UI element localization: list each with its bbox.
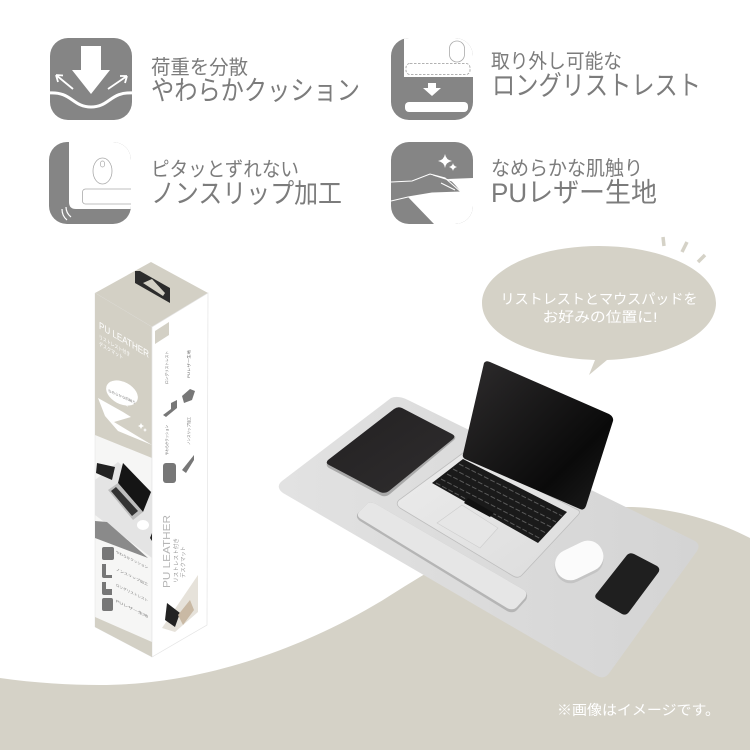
front icon 4 bbox=[102, 598, 113, 611]
side icon 3 bbox=[163, 463, 176, 483]
laptop keyboard bbox=[432, 459, 567, 543]
laptop base bbox=[397, 453, 580, 577]
box front face bbox=[95, 293, 152, 657]
heading: no slipping: ピタッとずれない bbox=[151, 158, 299, 181]
box side photo bbox=[162, 575, 198, 632]
background wave bbox=[0, 507, 750, 750]
icon: box handle bbox=[135, 271, 170, 303]
subheading: long wrist rest: ロングリストレスト bbox=[492, 71, 701, 101]
desk mat bbox=[279, 397, 699, 677]
mouse bbox=[550, 536, 608, 588]
heading: smooth touch: なめらかな肌触り bbox=[491, 157, 643, 180]
side icon 4 bbox=[182, 455, 194, 473]
box front feature icons bbox=[102, 547, 148, 619]
side text 2: PUレザー生地 bbox=[186, 349, 191, 378]
side icon 2 bbox=[182, 389, 195, 403]
laptop touchpad bbox=[437, 505, 498, 548]
heading: removable: 取り外し可能な bbox=[491, 50, 622, 73]
front icon 1 bbox=[102, 547, 114, 560]
feature: long wrist rest bbox=[391, 38, 701, 120]
box front title: PU LEATHER bbox=[99, 320, 149, 361]
icon: hand on leather bbox=[391, 142, 473, 224]
subheading: PU leather: PUレザー生地 bbox=[491, 178, 657, 208]
smartphone bbox=[595, 553, 659, 615]
box front laptop photo bbox=[95, 462, 152, 558]
laptop bbox=[397, 361, 613, 577]
side text 3: やわらかクッション bbox=[164, 425, 169, 455]
laptop screen bbox=[463, 361, 613, 510]
front feature text 3: ロングリストレスト bbox=[116, 582, 148, 603]
front feature text 4: PUレザー生地 bbox=[116, 598, 148, 619]
box side subtitle: リストレスト付き bbox=[172, 538, 180, 583]
bubble text: リストレストとマウスパッドを bbox=[500, 291, 698, 307]
box side title: PU LEATHER bbox=[162, 515, 173, 588]
callout small text: なめらかな肌触り bbox=[108, 388, 136, 405]
side text 4: ノンスリップ加工 bbox=[186, 417, 191, 445]
image disclaimer note: ※画像はイメージです。 bbox=[557, 702, 720, 718]
box side icons bbox=[163, 349, 195, 483]
bubble text line 2: お好みの位置に! bbox=[542, 309, 658, 325]
wrist rest bbox=[357, 503, 527, 612]
box spec label bbox=[155, 322, 169, 344]
subheading: non-slip: ノンスリップ加工 bbox=[151, 179, 342, 209]
box right face bbox=[152, 293, 208, 657]
product box bbox=[95, 262, 208, 657]
box front subtitle: リストレスト付き bbox=[99, 333, 130, 359]
icon: removable wrist rest bbox=[391, 38, 473, 120]
tablet bbox=[327, 407, 455, 496]
box side subtitle line 2: デスクマット bbox=[179, 546, 187, 578]
front icon 2 bbox=[102, 564, 112, 578]
box front bottom band bbox=[95, 617, 152, 657]
box front dark strip bbox=[95, 521, 148, 558]
feature: PU leather bbox=[391, 142, 657, 224]
subheading: cushion: やわらかクッション bbox=[151, 76, 360, 106]
heading: cushion: 荷重を分散 bbox=[151, 56, 248, 79]
front icon 3 bbox=[102, 582, 112, 595]
box front callout bbox=[98, 375, 152, 445]
front feature text 2: ノンスリップ加工 bbox=[116, 566, 148, 587]
side text 1: ロングリストレスト bbox=[164, 351, 169, 384]
box handle opening bbox=[143, 279, 165, 296]
box front subtitle line 2: デスクマット bbox=[99, 340, 123, 361]
box top face bbox=[95, 262, 208, 327]
box front beige panel bbox=[95, 293, 152, 458]
feature: soft cushion bbox=[48, 38, 360, 120]
feature: non-slip bbox=[49, 142, 342, 224]
front feature text 1: やわらかクッション bbox=[116, 549, 148, 570]
bubble accent ticks bbox=[663, 237, 705, 262]
icon: non-slip mat bbox=[49, 142, 131, 224]
side icon 1 bbox=[163, 400, 177, 417]
icon: cushion arrow bbox=[48, 38, 134, 120]
speech bubble bbox=[482, 237, 716, 375]
